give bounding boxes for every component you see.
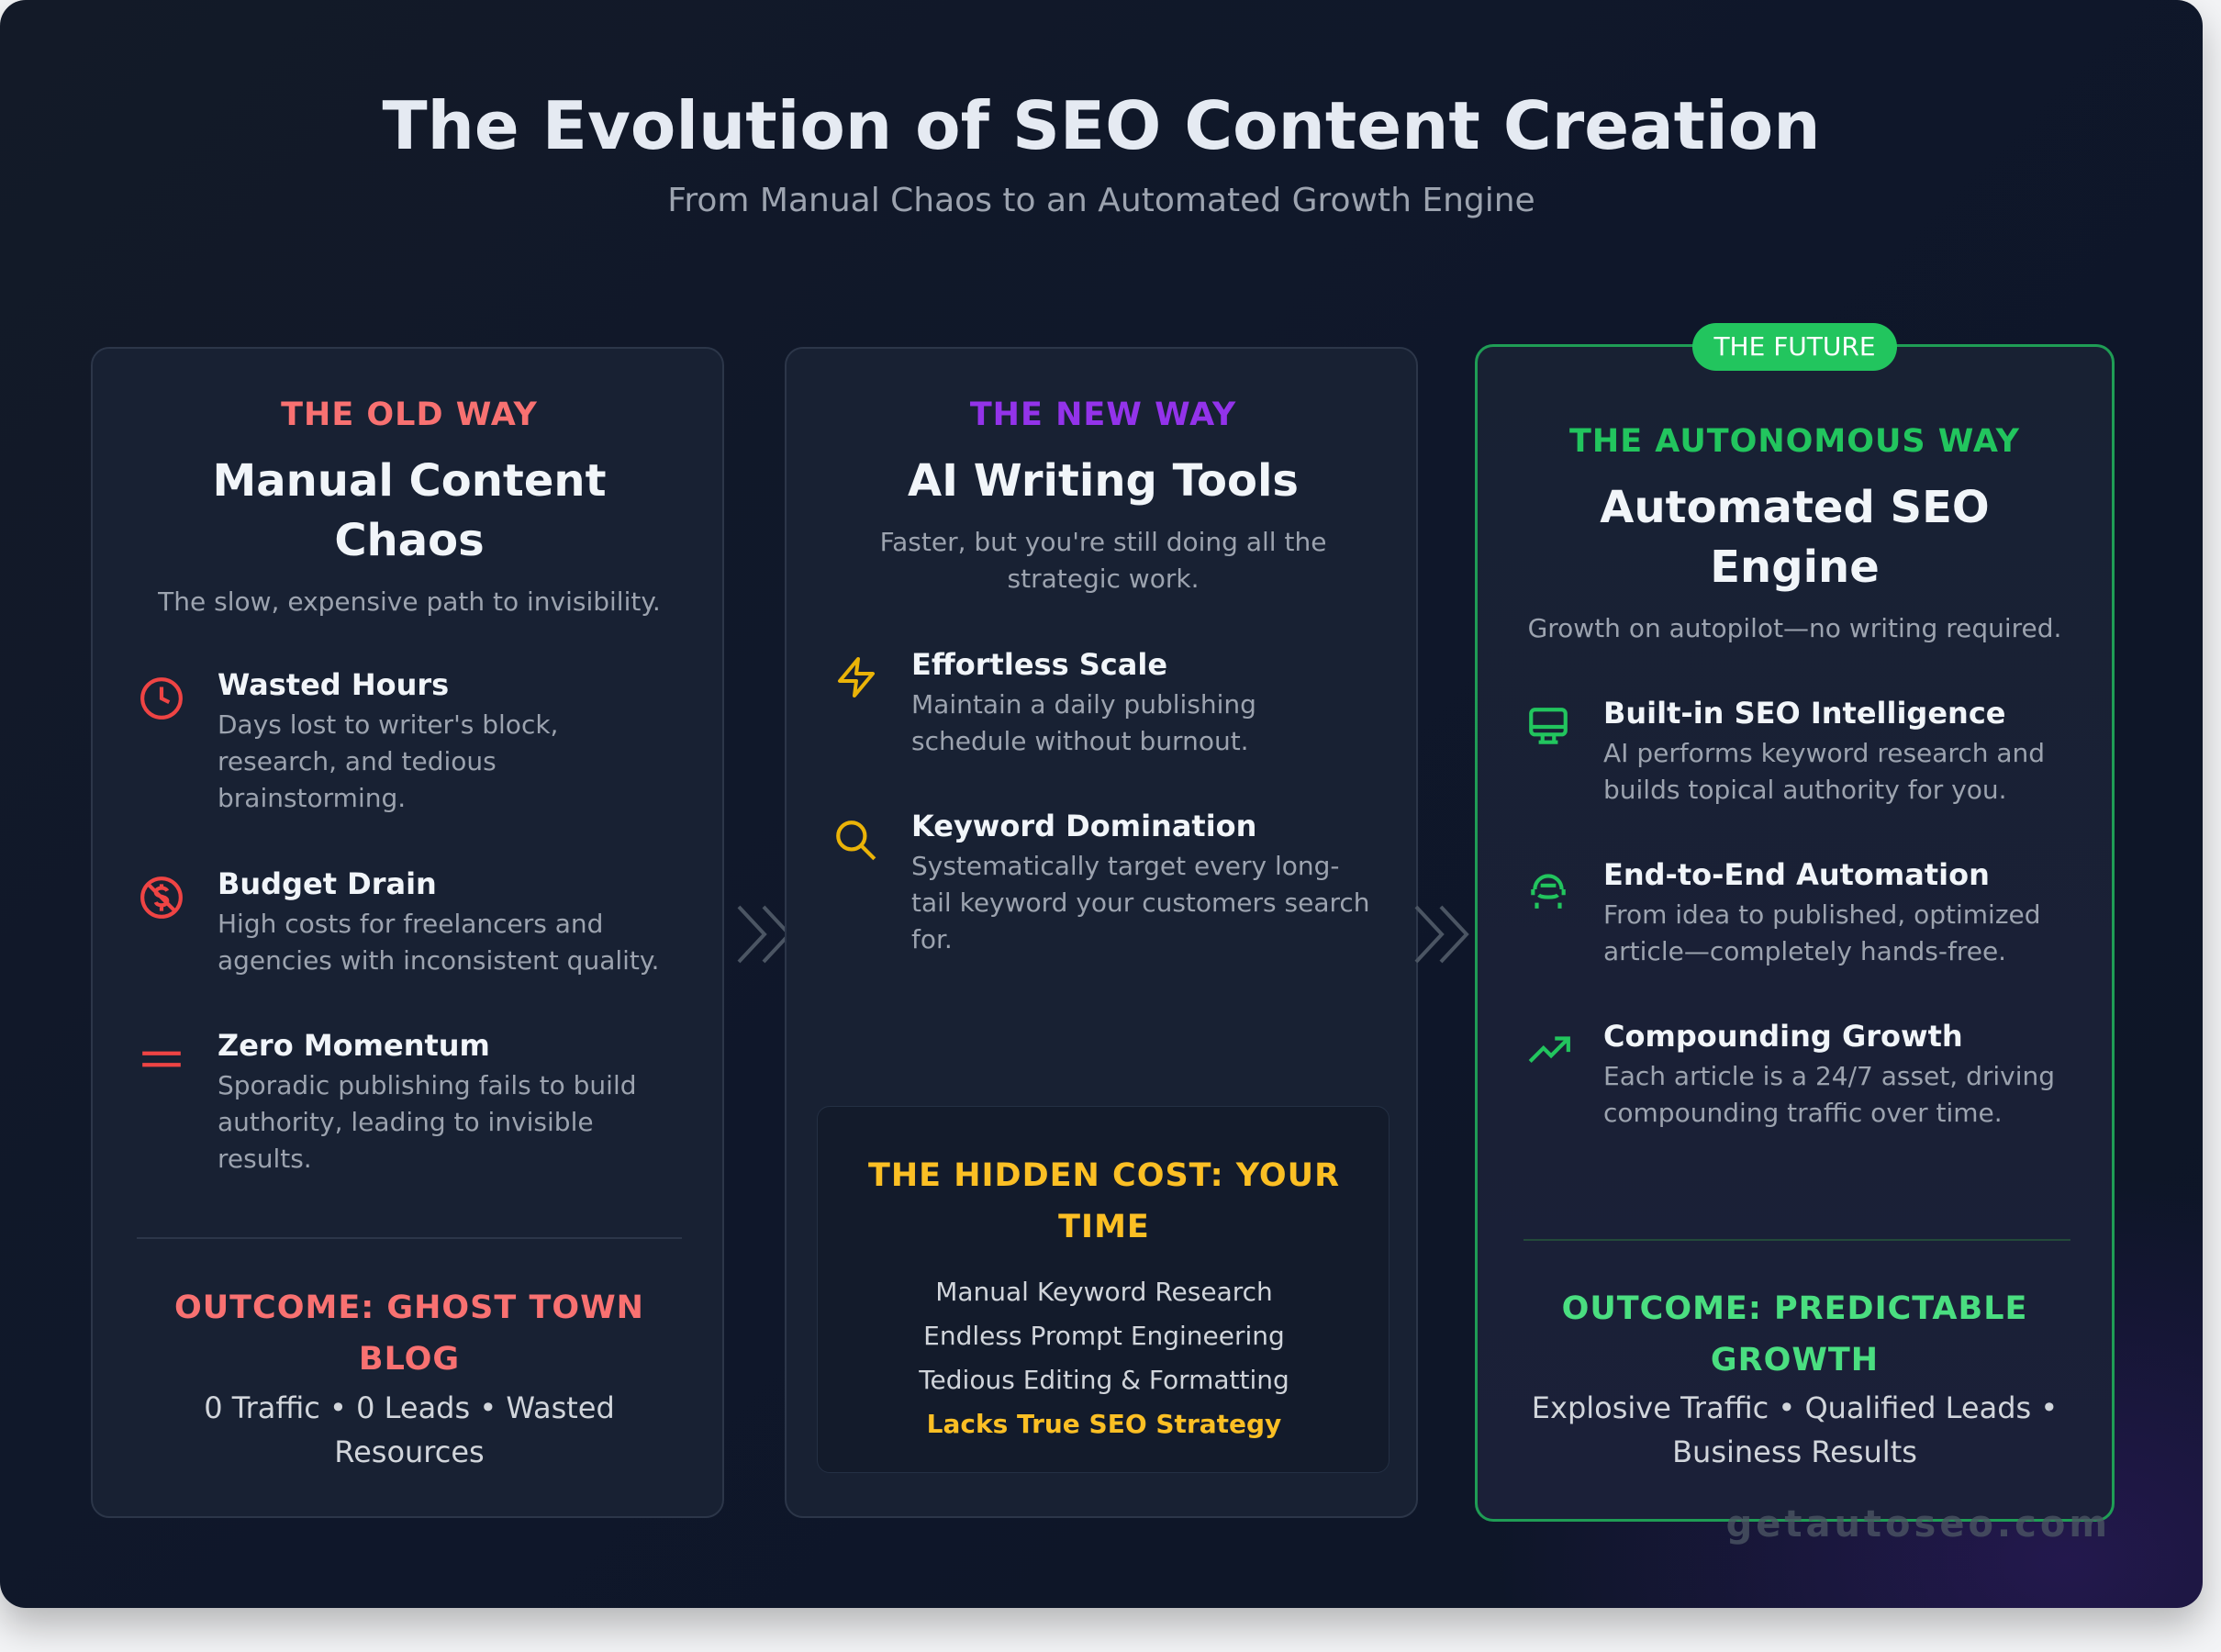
callout: hidden cost: Manual Keyword Research <box>935 1277 1273 1307</box>
item: seo intelligence: builds topical authority for you. <box>1603 775 2006 805</box>
icon: lightning <box>837 657 876 698</box>
item: keyword domination: Systematically target every long- <box>911 851 1339 881</box>
outcome: ghost town: BLOG <box>359 1341 460 1378</box>
item: automation: article—completely hands-free. <box>1603 936 2006 966</box>
item: keyword domination <box>836 809 1370 954</box>
icon: monitor <box>1529 708 1568 744</box>
outcome stats: Explosive Traffic • Qualified Leads • <box>1532 1390 2058 1425</box>
outcome stats: 0 Traffic • 0 Leads • Wasted <box>204 1390 615 1425</box>
item: zero momentum: Zero Momentum <box>218 1028 490 1063</box>
outcome: ghost town <box>174 1289 644 1378</box>
heading: ai writing tools: AI Writing Tools <box>908 455 1299 507</box>
title: The Evolution of SEO Content Creation <box>382 87 1820 164</box>
heading: manual content chaos: Chaos <box>334 515 485 566</box>
item: effortless scale <box>837 647 1256 756</box>
item: keyword domination: for. <box>911 924 953 954</box>
arrow: old to new <box>738 905 785 964</box>
tagline: Faster, but you're still doing all the <box>880 527 1326 557</box>
item: zero momentum: authority, leading to invisible <box>218 1107 594 1137</box>
watermark: getautoseo.com <box>1726 1503 2111 1546</box>
item: automation: From idea to published, optimized <box>1603 899 2041 930</box>
item: compounding growth: Compounding Growth <box>1603 1019 1963 1054</box>
icon: clock <box>140 677 183 720</box>
badge: the future: THE FUTURE <box>1713 331 1876 362</box>
item: wasted hours: brainstorming. <box>218 783 406 813</box>
tagline: The slow, expensive path to invisibility. <box>158 586 661 617</box>
heading: automated seo engine: Automated SEO <box>1600 482 1990 533</box>
item: automation: End-to-End Automation <box>1603 857 1990 892</box>
item: keyword domination: tail keyword your customers search <box>911 887 1370 918</box>
item: budget drain: agencies with inconsistent quality. <box>218 945 659 976</box>
item: effortless scale: schedule without burnout. <box>911 726 1249 756</box>
icon: robot <box>1531 874 1566 909</box>
icon: no dollar <box>140 876 183 919</box>
icon: flat lines <box>142 1052 181 1066</box>
item: keyword domination: Keyword Domination <box>911 809 1256 843</box>
callout: hidden cost <box>817 1106 1390 1473</box>
item: wasted hours <box>140 667 558 813</box>
badge: the future <box>1692 323 1897 371</box>
item: wasted hours: Wasted Hours <box>218 667 449 702</box>
item: effortless scale: Effortless Scale <box>911 647 1167 682</box>
outcome: ghost town: OUTCOME: GHOST TOWN <box>174 1289 644 1326</box>
item: seo intelligence: Built-in SEO Intelligence <box>1603 696 2005 731</box>
callout: hidden cost: TIME <box>1058 1209 1150 1245</box>
outcome: predictable growth: GROWTH <box>1711 1342 1879 1379</box>
item: budget drain: High costs for freelancers and <box>218 909 603 939</box>
item: budget drain <box>140 866 659 976</box>
item: seo intelligence <box>1529 696 2045 805</box>
outcome: predictable growth <box>1562 1290 2027 1379</box>
item: compounding growth <box>1529 1019 2055 1128</box>
item: compounding growth: compounding traffic over time. <box>1603 1098 2003 1128</box>
item: compounding growth: Each article is a 24/7 asset, driving <box>1603 1061 2055 1091</box>
item: zero momentum: results. <box>218 1144 312 1174</box>
item: zero momentum <box>142 1028 637 1174</box>
item: automation <box>1531 857 2041 966</box>
panel: old way <box>91 347 724 1518</box>
item: wasted hours: Days lost to writer's block, <box>218 709 558 740</box>
item: effortless scale: Maintain a daily publishing <box>911 689 1256 720</box>
callout: hidden cost: Lacks True SEO Strategy <box>927 1409 1281 1439</box>
heading: automated seo engine <box>1600 482 1990 593</box>
subtitle: From Manual Chaos to an Automated Growth Engine <box>667 182 1535 219</box>
heading: manual content chaos: Manual Content <box>212 455 607 507</box>
label: the new way: THE NEW WAY <box>970 396 1236 433</box>
callout: hidden cost: Endless Prompt Engineering <box>923 1321 1285 1351</box>
callout: hidden cost: Tedious Editing & Formatting <box>919 1365 1289 1395</box>
tagline: Growth on autopilot—no writing required. <box>1528 613 2061 643</box>
label: the autonomous way: THE AUTONOMOUS WAY <box>1569 423 2020 460</box>
callout: hidden cost: THE HIDDEN COST: YOUR <box>868 1157 1340 1194</box>
panel: new way <box>785 347 1418 1518</box>
item: zero momentum: Sporadic publishing fails to build <box>218 1070 637 1100</box>
outcome stats: Business Results <box>1672 1434 1917 1469</box>
tagline <box>880 527 1326 594</box>
heading: automated seo engine: Engine <box>1710 541 1880 593</box>
item: budget drain: Budget Drain <box>218 866 437 901</box>
outcome stats <box>1532 1390 2058 1469</box>
label: the old way: THE OLD WAY <box>281 396 538 433</box>
heading: manual content chaos <box>212 455 607 566</box>
item: wasted hours: research, and tedious <box>218 746 497 776</box>
item: seo intelligence: AI performs keyword research and <box>1603 738 2045 768</box>
outcome stats <box>204 1390 615 1469</box>
arrow: new to autonomous <box>1415 905 1468 964</box>
outcome stats: Resources <box>334 1434 485 1469</box>
outcome: predictable growth: OUTCOME: PREDICTABLE <box>1562 1290 2027 1327</box>
icon: magnifier <box>836 820 876 861</box>
panel: autonomous way <box>1475 344 2115 1522</box>
tagline: strategic work. <box>1008 564 1199 594</box>
icon: trending up <box>1529 1036 1570 1063</box>
